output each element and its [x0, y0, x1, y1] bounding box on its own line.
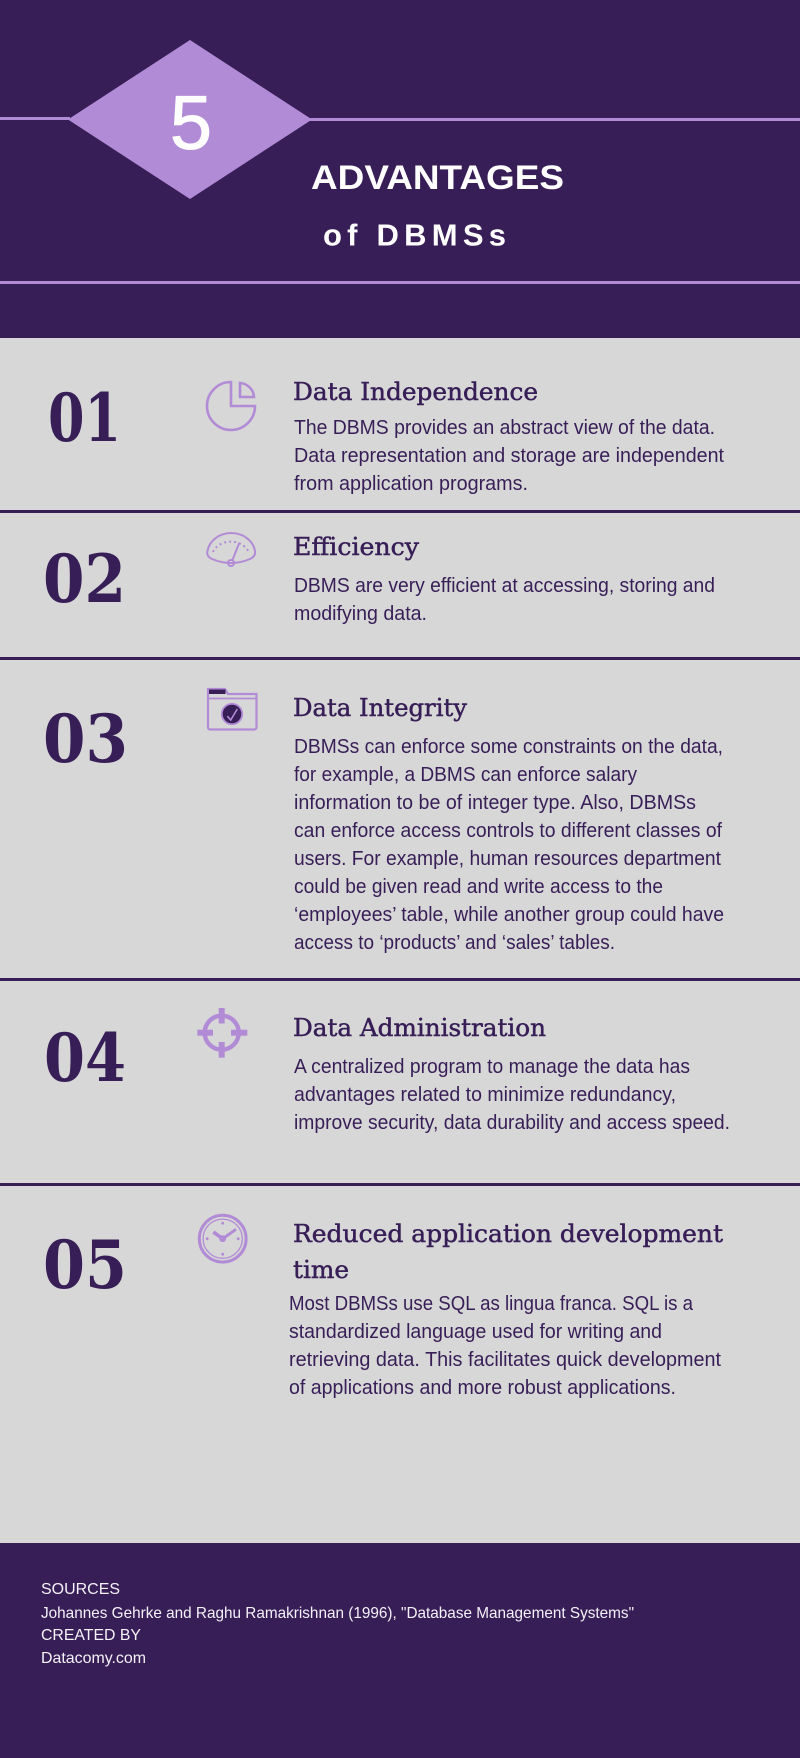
text block: data integrity: could be given read and write access to the	[294, 876, 663, 898]
text block: data independence	[294, 417, 724, 495]
panel: reduced application development time	[0, 1186, 800, 1543]
number 04: 04	[44, 1019, 126, 1097]
panel: data administration	[0, 981, 800, 1183]
icon: folder with check	[208, 689, 256, 730]
number 05: 05	[43, 1226, 127, 1304]
text block: data independence: The DBMS provides an abstract view of the data.	[294, 417, 715, 439]
heading: efficiency: Efficiency	[293, 533, 419, 561]
panel: data integrity	[0, 660, 800, 978]
text block: efficiency	[294, 575, 715, 625]
title	[311, 159, 564, 252]
text block: sources and credits: Datacomy.com	[41, 1650, 146, 1667]
icon: pie chart	[207, 382, 255, 430]
text block: data integrity: access to ‘products’ and ‘sales’ tables.	[294, 932, 615, 954]
text block: data independence: Data representation and storage are independent	[294, 445, 724, 467]
text block: data integrity: users. For example, human resources department	[294, 848, 721, 870]
text block: reduced application development time: of applications and more robust applications.	[289, 1377, 676, 1399]
text block: efficiency: modifying data.	[294, 603, 427, 625]
text block: data administration: A centralized program to manage the data has	[294, 1056, 690, 1078]
panel: header	[0, 0, 800, 338]
heading: reduced application development time	[293, 1220, 723, 1284]
text block: sources and credits: Johannes Gehrke and Raghu Ramakrishnan (1996), "Database Management Systems"	[41, 1605, 634, 1622]
text block: data administration: improve security, data durability and access speed.	[294, 1112, 730, 1134]
text block: data integrity: ‘employees’ table, while another group could have	[294, 904, 724, 926]
text block: efficiency: DBMS are very efficient at accessing, storing and	[294, 575, 715, 597]
number 01: 01	[48, 379, 121, 457]
title: ADVANTAGES	[311, 159, 564, 197]
panel: footer	[0, 1543, 800, 1758]
text block: data administration: advantages related to minimize redundancy,	[294, 1084, 676, 1106]
panel: data independence	[0, 338, 800, 510]
text block: data integrity: can enforce access controls to different classes of	[294, 820, 722, 842]
icon: clock	[199, 1215, 246, 1262]
number 02: 02	[43, 540, 126, 618]
text block: reduced application development time: Most DBMSs use SQL as lingua franca. SQL is a	[289, 1293, 694, 1315]
text block: reduced application development time: retrieving data. This facilitates quick development	[289, 1349, 721, 1371]
panel: efficiency	[0, 513, 800, 657]
text block: data integrity: DBMSs can enforce some constraints on the data,	[294, 736, 723, 758]
icon: crosshair target	[197, 1008, 247, 1058]
text block: sources and credits: CREATED BY	[41, 1627, 141, 1644]
text block: sources and credits: SOURCES	[41, 1581, 120, 1598]
text block: reduced application development time: standardized language used for writing and	[289, 1321, 662, 1343]
title: of DBMSs	[323, 218, 506, 252]
heading: data independence: Data Independence	[293, 378, 538, 406]
text block: data integrity	[294, 736, 724, 954]
heading: data administration: Data Administration	[293, 1014, 546, 1042]
heading: reduced application development time: time	[293, 1256, 349, 1284]
text block: data integrity: for example, a DBMS can enforce salary	[294, 764, 637, 786]
text block: data administration	[294, 1056, 730, 1134]
heading: reduced application development time: Reduced application development	[293, 1220, 723, 1248]
number 03: 03	[43, 700, 128, 778]
text block: data integrity: information to be of integer type. Also, DBMSs	[294, 792, 696, 814]
icon: diamond with number 5: 5	[170, 81, 212, 166]
text block: data independence: from application programs.	[294, 473, 528, 495]
heading: data integrity: Data Integrity	[293, 694, 467, 722]
icon: diamond with number 5	[68, 40, 312, 199]
text block: sources and credits	[41, 1581, 634, 1667]
icon: gauge	[207, 533, 255, 566]
text block: reduced application development time	[289, 1293, 721, 1399]
